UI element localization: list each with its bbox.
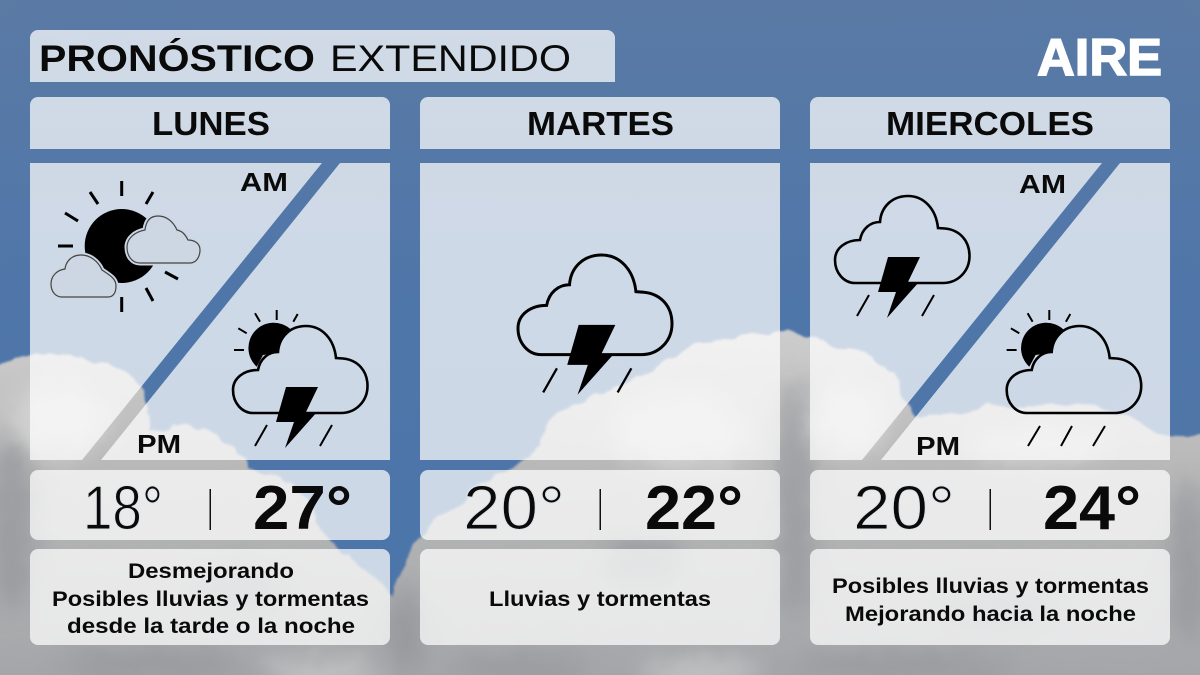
lunes description: Posibles lluvias y tormentas [52, 588, 369, 611]
lunes temperatures: 27° [253, 474, 352, 543]
panel: martes [420, 97, 780, 645]
lunes temperatures [30, 470, 390, 543]
title bar [30, 30, 615, 82]
label AM: AM [1019, 169, 1066, 199]
title text: PRONÓSTICO [39, 37, 315, 79]
label AM: AM [240, 167, 288, 197]
label PM: PM [916, 431, 960, 461]
label PM: PM [137, 429, 181, 459]
miercoles description [810, 549, 1170, 645]
martes description: Lluvias y tormentas [489, 588, 711, 611]
lunes heading: LUNES [152, 105, 270, 142]
panel: miercoles [810, 97, 1170, 645]
icon: sun, storm cloud [233, 310, 368, 448]
lunes description: desde la tarde o la noche [67, 615, 355, 638]
title text: EXTENDIDO [330, 38, 571, 79]
martes temperatures: 22° [645, 474, 743, 543]
icon: sun, rain cloud [1007, 310, 1141, 446]
logo: AIRE: AIRE [1037, 29, 1162, 87]
panel: lunes [30, 97, 390, 645]
lunes description [30, 549, 390, 645]
miercoles heading: MIERCOLES [886, 105, 1094, 142]
icon: storm cloud [518, 255, 672, 395]
miercoles temperatures: 20° [853, 474, 955, 543]
miercoles temperatures [810, 470, 1170, 543]
background: clouds [0, 320, 1200, 675]
miercoles description: Posibles lluvias y tormentas [832, 575, 1149, 598]
lunes description: Desmejorando [128, 560, 294, 583]
icon: storm cloud [835, 196, 970, 318]
lunes heading [30, 97, 390, 149]
miercoles sky split panel [810, 163, 1170, 460]
icon: sun with clouds [51, 181, 200, 312]
martes description [420, 549, 780, 645]
martes temperatures: 20° [463, 474, 565, 543]
martes temperatures [420, 470, 780, 543]
martes sky panel [420, 163, 780, 460]
miercoles description: Mejorando hacia la noche [845, 603, 1136, 626]
lunes temperatures: 18° [83, 474, 163, 543]
martes heading [420, 97, 780, 149]
miercoles heading [810, 97, 1170, 149]
lunes sky split panel [30, 163, 390, 460]
miercoles temperatures: 24° [1043, 474, 1141, 543]
martes heading: MARTES [527, 105, 674, 142]
